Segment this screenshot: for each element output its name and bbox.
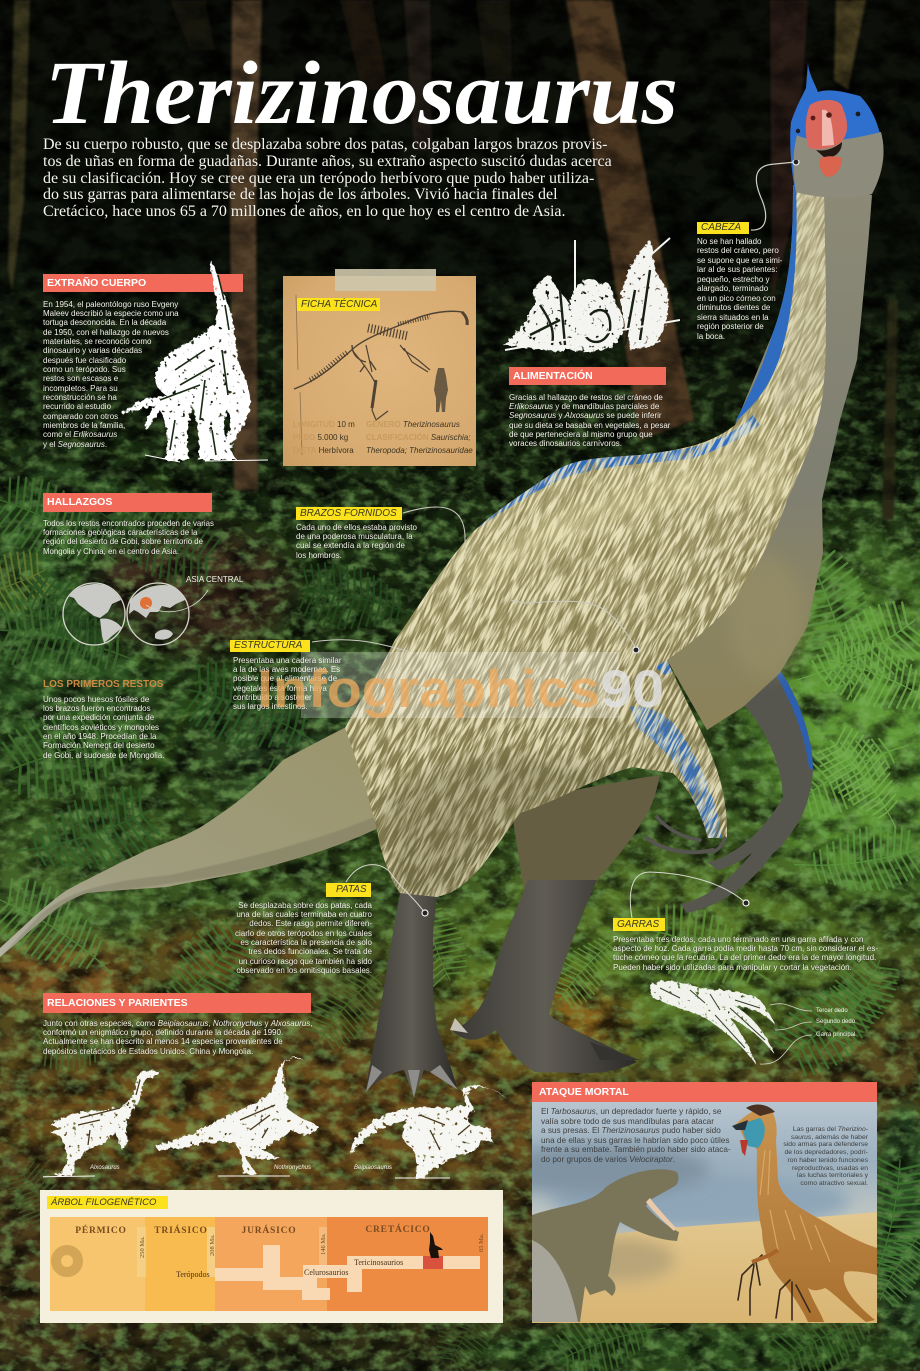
far leg (452, 880, 637, 1073)
timeline chart: CRETÁCICO (365, 1223, 431, 1235)
leader line: brazos fornidos (402, 506, 466, 562)
heading: estructura: ESTRUCTURA (234, 640, 302, 651)
label: Asia central: ASIA CENTRAL (186, 575, 243, 584)
text: attack main: El Tarbosaurus, un depredador fuerte y rápido, se valía sobre todo de sus mandíbulas para atacar a sus presas. El Therizinosaurus pudo haber sido una de ellas y sus garras le habrían sido poco útiles frente a su embate. También pudo haber sido ataca- do por grupos de varios Velociraptor. (541, 1107, 731, 1164)
text: hallazgos: Todos los restos encontrados proceden de varias formaciones geológicas características de la región del desierto de Gobi, sobre territorio de Mongolia y China, en el centro de Asia. (43, 518, 214, 556)
heading: alimentación: ALIMENTACIÓN (513, 370, 593, 382)
panel: árbol filogenético (40, 1190, 503, 1323)
timeline chart: 146 Ma. (320, 1233, 327, 1255)
heading: extraño cuerpo: EXTRAÑO CUERPO (47, 277, 146, 289)
panel: hallazgos (43, 493, 244, 646)
text: attack side note: Las garras del Therizino- saurus, además de haber sido armas para defenderse de los depredadores, podrí- ron haber tenido funciones reproductivas, usadas en las luchas territoriales y como atractivo sexual. (783, 1126, 868, 1187)
heading: ficha técnica: FICHA TÉCNICA (301, 299, 377, 310)
text: relaciones y parientes: Junto con otras especies, como Beipiaosaurus, Nothronychus y Alxosaurus, conformó un enigmático grupo, definido durante la década de 1990. Actualmente se han descrito al menos 14 especies provenientes de depósitos cretácicos de Estados Unidos, China y Mongolia. (43, 1018, 313, 1056)
callout: cabeza (697, 160, 800, 340)
text: garras: Presentaba tres dedos, cada uno terminado en una garra afilada y con aspecto de hoz. Cada garra podía medir hasta 70 cm, sin considerar el es- tuche córneo que la recubría. La del primer dedo era la de mayor longitud. Pueden haber sido utilizadas para manipular y cortar la vegetación. (613, 934, 878, 972)
leader line: estructura (312, 600, 640, 654)
label: Beipiaosaurus: Beipiaosaurus (354, 1165, 392, 1171)
text: extraño cuerpo: En 1954, el paleontólogo ruso Evgeny Maleev describió la especie como una tortuga desconocida. En la década de 1950, con el hallazgo de nuevos materiales, se reconoció como dinosaurio y varias décadas después fue clasificado como un terópodo. Sus restos son escasos e incompletos. Para su reconstrucción se ha recurrido al estudio comparado con otros miembros de la familia, como el Erlikosaurus y el Segnosaurus. (43, 300, 179, 449)
far thigh (510, 775, 660, 925)
heading: relaciones y parientes: RELACIONES Y PARIENTES (47, 997, 188, 1009)
tree trunks (8, 0, 898, 520)
heading: garras (613, 918, 665, 931)
card paper (283, 276, 476, 466)
watermark (257, 652, 664, 719)
heading: patas (326, 883, 371, 897)
heading: árbol filogenético: ÁRBOL FILOGENÉTICO (51, 1197, 156, 1208)
callout: garras (66, 872, 878, 1314)
leader line: patas (346, 864, 429, 917)
near hand claws (647, 817, 725, 852)
timeline chart: JURÁSICO (242, 1224, 296, 1236)
near leg (366, 893, 457, 1097)
label: Alxosaurus: Alxosaurus (90, 1165, 120, 1171)
blue neck fringe (735, 185, 797, 422)
panel: ficha técnica card (283, 269, 476, 466)
panel: alimentación (503, 237, 680, 448)
leader line: cabeza (751, 160, 800, 231)
intro text: De su cuerpo robusto, que se desplazaba sobre dos patas, colgaban largos brazos provis- tos de uñas en forma de guadañas. Durante años, su extraño aspecto suscitó dudas acerca de su clasificación. Hoy se cree que era un terópodo herbívoro que pudo haber utiliza- do sus garras para alimentarse de las hojas de los árboles. Vivió hacia finales del Cretácico, hace unos 65 a 70 millones de años, en lo que hoy es el centro de Asia. (43, 136, 612, 220)
timeline chart: 65 Ma. (478, 1233, 485, 1252)
heading: garras: GARRAS (617, 919, 659, 930)
fern fronds (0, 467, 920, 1371)
text: los primeros restos: Unos pocos huesos fósiles de los brazos fueron encontrados por una expedición conjunta de científicos soviéticos y mongoles en el año 1948. Procedían de la Formación Nemegt del desierto de Gobi, al sudoeste de Mongolia. (43, 694, 164, 760)
label: segundo dedo: Segundo dedo (816, 1019, 855, 1025)
text: classification column: GÉNERO Therizinosaurus CLASIFICACIÓN Saurischia; Theropoda; Therizinosauridae (366, 420, 473, 455)
watermark band (301, 652, 619, 718)
icons: three white relative dinosaur sketches (43, 1056, 506, 1179)
callout: estructura (230, 600, 640, 711)
heading: ataque mortal (532, 1082, 877, 1102)
feathered body (345, 192, 826, 897)
watermark text: Infographics 90 (257, 660, 664, 719)
skeleton drawing (294, 295, 469, 455)
timeline chart: PÉRMICO (75, 1224, 127, 1236)
heading: hallazgos: HALLAZGOS (47, 496, 112, 508)
label: Nothronychus: Nothronychus (274, 1165, 311, 1171)
heading: hallazgos (43, 493, 212, 512)
panel: extraño cuerpo (43, 260, 679, 462)
callout: brazos fornidos (296, 88, 824, 1054)
timeline chart (50, 1217, 488, 1311)
text: brazos fornidos: Cada uno de ellos estaba provisto de una poderosa musculatura, la cual se extendía a la región de los hombros. (296, 522, 417, 560)
text: patas: Se desplazaba sobre dos patas, cada una de las cuales terminaba en cuatro dedos. Este rasgo permite diferen- ciarlo de otros terópodos en los cuales es característica la presencia de solo tres dedos funcionales. Se trata de un curioso rasgo que también ha sido observado en los ornitisquios basales. (235, 900, 372, 975)
timeline chart: 250 Ma. (139, 1236, 146, 1258)
callout: patas (235, 864, 759, 1062)
text: estructura: Presentaba una cadera similar a la de las aves modernas. Es posible que al alimentarse de vegetales esta forma haya contribuido a sostener sus largos intestinos. (233, 656, 342, 711)
text: cabeza: No se han hallado restos del cráneo, pero se supone que era simi- lar al de sus parientes: pequeño, estrecho y alargado, terminado en un pico córneo con diminutos dientes de sierra situados en la región posterior de la boca. (697, 236, 782, 340)
heading: relaciones y parientes (43, 993, 311, 1013)
timeline chart: Terópodos (176, 1270, 210, 1279)
tail (0, 700, 400, 957)
heading: patas: PATAS (336, 884, 367, 895)
panel: los primeros restos (43, 582, 190, 760)
tape (335, 269, 436, 291)
blue back and shoulder feathers (470, 415, 760, 838)
human scale figure (434, 368, 448, 412)
map: two globes with central Asia marker (62, 582, 208, 646)
heading: brazos fornidos: BRAZOS FORNIDOS (300, 508, 397, 519)
toe claws (366, 1018, 640, 1098)
chest highlight (727, 553, 803, 677)
timeline chart: TRIÁSICO (154, 1224, 208, 1236)
timeline chart: Celurosaurios (304, 1268, 348, 1277)
scene: battle illustration (532, 1102, 877, 1323)
labels: claw fingers: Tercer dedo (816, 1008, 848, 1014)
heading: alimentación (509, 367, 666, 385)
text: alimentación: Gracias al hallazgo de restos del cráneo de Erlikosaurus y de mandíbulas parciales de Segnosaurus y Alxosaurus se puede inferir que su dieta se basaba en vegetales, a pesar de que perteneciera al mismo grupo que voraces dinosaurios carnívoros. (509, 392, 670, 448)
heading: extraño cuerpo (43, 274, 243, 292)
panel: ataque mortal (532, 1082, 877, 1323)
heading: los primeros restos: LOS PRIMEROS RESTOS (43, 679, 163, 690)
icon: white sketch of dinosaur (121, 260, 268, 462)
leader line: garras (630, 872, 750, 918)
head (790, 62, 884, 198)
heading: cabeza: CABEZA (701, 222, 741, 233)
heading: ataque mortal: ATAQUE MORTAL (539, 1086, 629, 1098)
timeline chart: 208 Ma. (209, 1234, 216, 1256)
text: stats column: LONGITUD 10 m PESO 5.000 kg DIETA Herbívora (293, 420, 355, 455)
panel: relaciones y parientes (43, 993, 870, 1320)
far arm with claws (680, 670, 813, 913)
label: garra principal: Garra principal (816, 1032, 855, 1038)
neck and chest (667, 185, 872, 730)
icon: white claw sketch with leader lines (650, 980, 812, 1065)
icon: white sketch of plants being eaten (503, 237, 680, 352)
timeline chart: Tericinosaurios (354, 1258, 403, 1267)
